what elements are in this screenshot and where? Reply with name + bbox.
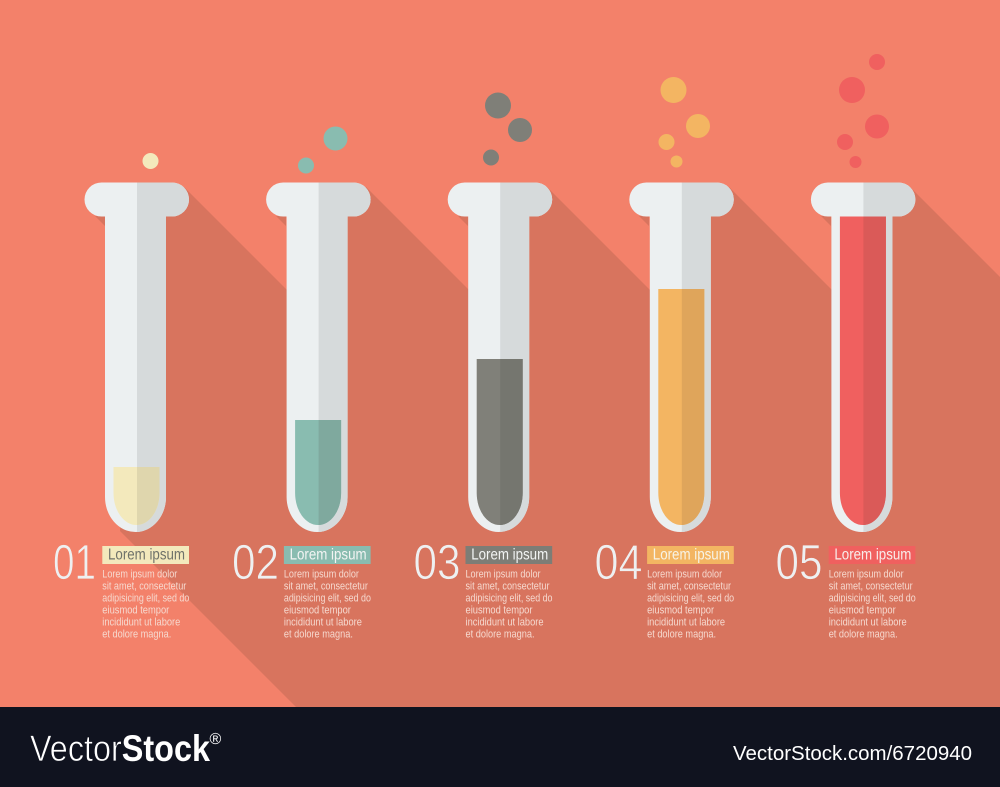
tube body bbox=[266, 182, 371, 532]
body text: et dolore magna. bbox=[284, 628, 353, 640]
body text: eiusmod tempor bbox=[466, 604, 533, 616]
caption 1 bbox=[53, 536, 189, 640]
label box bbox=[102, 546, 189, 564]
registered mark: ® bbox=[210, 731, 222, 748]
number: 04 bbox=[594, 536, 642, 590]
body text bbox=[647, 568, 734, 640]
tube shaded half bbox=[137, 182, 189, 532]
body text: incididunt ut labore bbox=[647, 616, 725, 628]
body text: et dolore magna. bbox=[647, 628, 716, 640]
bubbles 3 bbox=[483, 92, 532, 166]
test tube 5 bbox=[811, 182, 915, 532]
body text: adipisicing elit, sed do bbox=[647, 592, 734, 604]
caption 5 bbox=[776, 536, 916, 640]
liquid shaded half bbox=[863, 216, 886, 525]
tube body bbox=[448, 182, 552, 532]
test tube 4 bbox=[629, 182, 734, 532]
body text: eiusmod tempor bbox=[829, 604, 896, 616]
tube shaded half bbox=[682, 182, 734, 532]
tube shaded half bbox=[500, 182, 552, 532]
body text: sit amet, consectetur bbox=[466, 580, 550, 592]
label box bbox=[466, 546, 552, 564]
bubbles 2 bbox=[298, 126, 348, 174]
test tube 1 bbox=[84, 182, 189, 532]
footer bar bbox=[0, 707, 1000, 787]
caption 2 bbox=[232, 536, 371, 640]
bubbles 5 bbox=[837, 54, 889, 168]
number: 03 bbox=[414, 536, 460, 590]
body text: Lorem ipsum dolor bbox=[829, 568, 904, 580]
body text: eiusmod tempor bbox=[284, 604, 351, 616]
tube body bbox=[811, 182, 915, 532]
body text: Lorem ipsum dolor bbox=[647, 568, 722, 580]
label box bbox=[284, 546, 371, 564]
label text: Lorem ipsum bbox=[108, 546, 185, 564]
body text: adipisicing elit, sed do bbox=[829, 592, 916, 604]
liquid bbox=[658, 289, 704, 525]
liquid bbox=[114, 467, 160, 525]
number: 02 bbox=[232, 536, 279, 590]
body text bbox=[102, 568, 189, 640]
body text: incididunt ut labore bbox=[102, 616, 180, 628]
long shadows bbox=[95, 187, 1000, 707]
body text: sit amet, consectetur bbox=[102, 580, 187, 592]
liquid shaded half bbox=[137, 467, 160, 525]
body text: Lorem ipsum dolor bbox=[102, 568, 178, 580]
body text: eiusmod tempor bbox=[102, 604, 170, 616]
body text: incididunt ut labore bbox=[829, 616, 907, 628]
test tube 3 bbox=[448, 182, 552, 532]
bubbles 1 bbox=[142, 153, 158, 169]
liquid shaded half bbox=[319, 420, 341, 525]
image id: VectorStock.com/6720940 bbox=[733, 743, 972, 765]
liquid shaded half bbox=[682, 289, 704, 525]
body text bbox=[284, 568, 371, 640]
body text: sit amet, consectetur bbox=[284, 580, 368, 592]
body text: Lorem ipsum dolor bbox=[284, 568, 359, 580]
body text: incididunt ut labore bbox=[284, 616, 362, 628]
liquid bbox=[840, 216, 886, 525]
tube body bbox=[84, 182, 189, 532]
bubbles 4 bbox=[658, 77, 710, 168]
tube shaded half bbox=[319, 182, 371, 532]
label text: Lorem ipsum bbox=[290, 546, 367, 564]
body text: adipisicing elit, sed do bbox=[284, 592, 371, 604]
liquid bbox=[295, 420, 341, 525]
caption 4 bbox=[594, 536, 734, 640]
label text: Lorem ipsum bbox=[834, 546, 911, 564]
tube shaded half bbox=[863, 182, 915, 532]
body text: adipisicing elit, sed do bbox=[102, 592, 189, 604]
number: 01 bbox=[53, 536, 96, 590]
body text: sit amet, consectetur bbox=[829, 580, 913, 592]
label text: Lorem ipsum bbox=[471, 546, 548, 564]
label text: Lorem ipsum bbox=[653, 546, 730, 564]
body text: adipisicing elit, sed do bbox=[466, 592, 552, 604]
body text bbox=[829, 568, 916, 640]
body text: et dolore magna. bbox=[102, 628, 171, 640]
label box bbox=[829, 546, 915, 564]
number: 05 bbox=[776, 536, 822, 590]
body text: et dolore magna. bbox=[829, 628, 898, 640]
body text: et dolore magna. bbox=[466, 628, 534, 640]
caption 3 bbox=[414, 536, 552, 640]
test tube 2 bbox=[266, 182, 371, 532]
body text: eiusmod tempor bbox=[647, 604, 714, 616]
body text: sit amet, consectetur bbox=[647, 580, 731, 592]
body text: incididunt ut labore bbox=[466, 616, 544, 628]
label box bbox=[647, 546, 734, 564]
body text: Lorem ipsum dolor bbox=[466, 568, 541, 580]
body text bbox=[466, 568, 552, 640]
liquid bbox=[477, 359, 523, 525]
logo: VectorStock bbox=[30, 728, 210, 769]
tube body bbox=[629, 182, 734, 532]
liquid shaded half bbox=[500, 359, 523, 525]
